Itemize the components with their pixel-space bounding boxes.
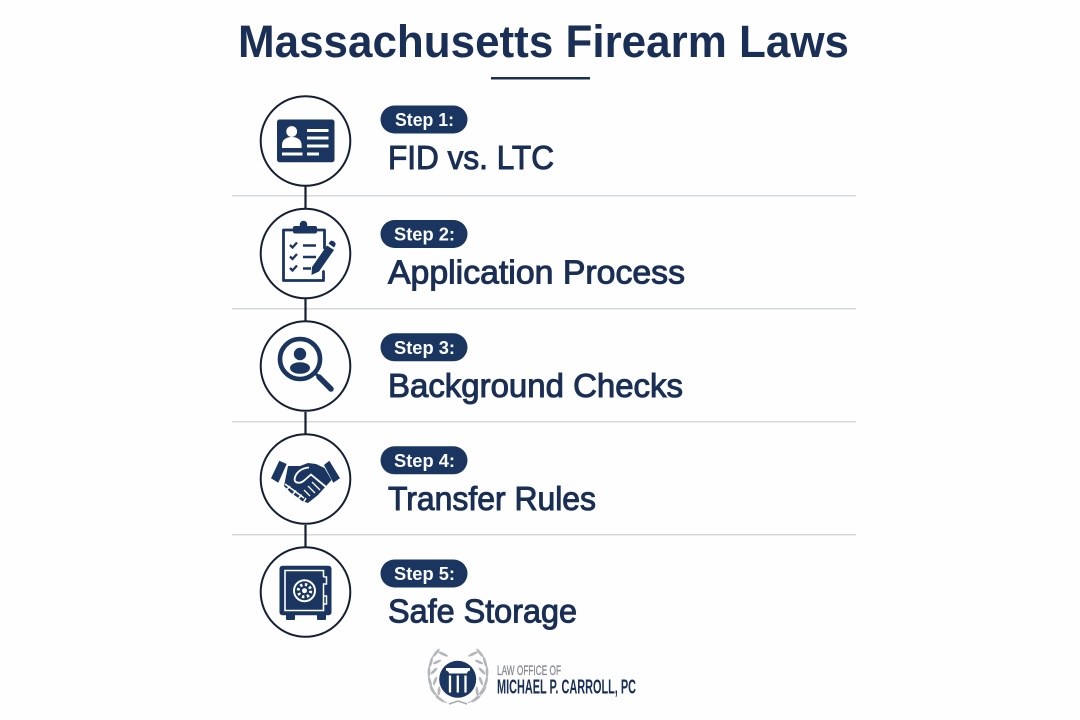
step 5 badge <box>380 560 468 588</box>
step 2 badge: Step 2: <box>394 224 455 244</box>
step 1 badge: Step 1: <box>395 110 454 130</box>
icon: clipboard and pen <box>261 209 350 298</box>
step 2: application process <box>261 209 685 298</box>
timeline connector <box>304 186 307 547</box>
icon: safe <box>261 547 350 637</box>
step 4 badge: Step 4: <box>394 451 455 471</box>
step 2 badge <box>380 220 468 248</box>
step 1: FID vs. LTC <box>261 96 554 186</box>
step 5 badge: Step 5: <box>394 564 455 584</box>
step 1 badge <box>380 106 468 134</box>
step 3 heading: Background Checks <box>388 367 683 404</box>
logo: law office of Michael P. Carroll <box>427 648 636 704</box>
logo text: LAW OFFICE OF <box>497 662 561 678</box>
step 5: safe storage <box>261 547 577 637</box>
icon: ID card <box>261 96 350 186</box>
step 4 heading: Transfer Rules <box>388 480 596 517</box>
step 2 heading: Application Process <box>388 254 685 290</box>
logo emblem <box>427 648 489 704</box>
step 4: transfer rules <box>261 434 596 524</box>
icon: magnifier over person <box>261 321 350 411</box>
logo: law office of Michael P. Carroll: MICHAEL P. CARROLL, PC <box>497 676 636 698</box>
step 3: background checks <box>261 321 683 411</box>
step 1 heading: FID vs. LTC <box>388 139 554 176</box>
step 4 badge <box>380 446 468 474</box>
step 5 heading: Safe Storage <box>388 592 577 630</box>
step 3 badge <box>380 333 468 361</box>
title: Massachusetts Firearm Laws <box>238 16 849 67</box>
step 3 badge: Step 3: <box>394 338 455 358</box>
icon: handshake <box>261 434 350 524</box>
